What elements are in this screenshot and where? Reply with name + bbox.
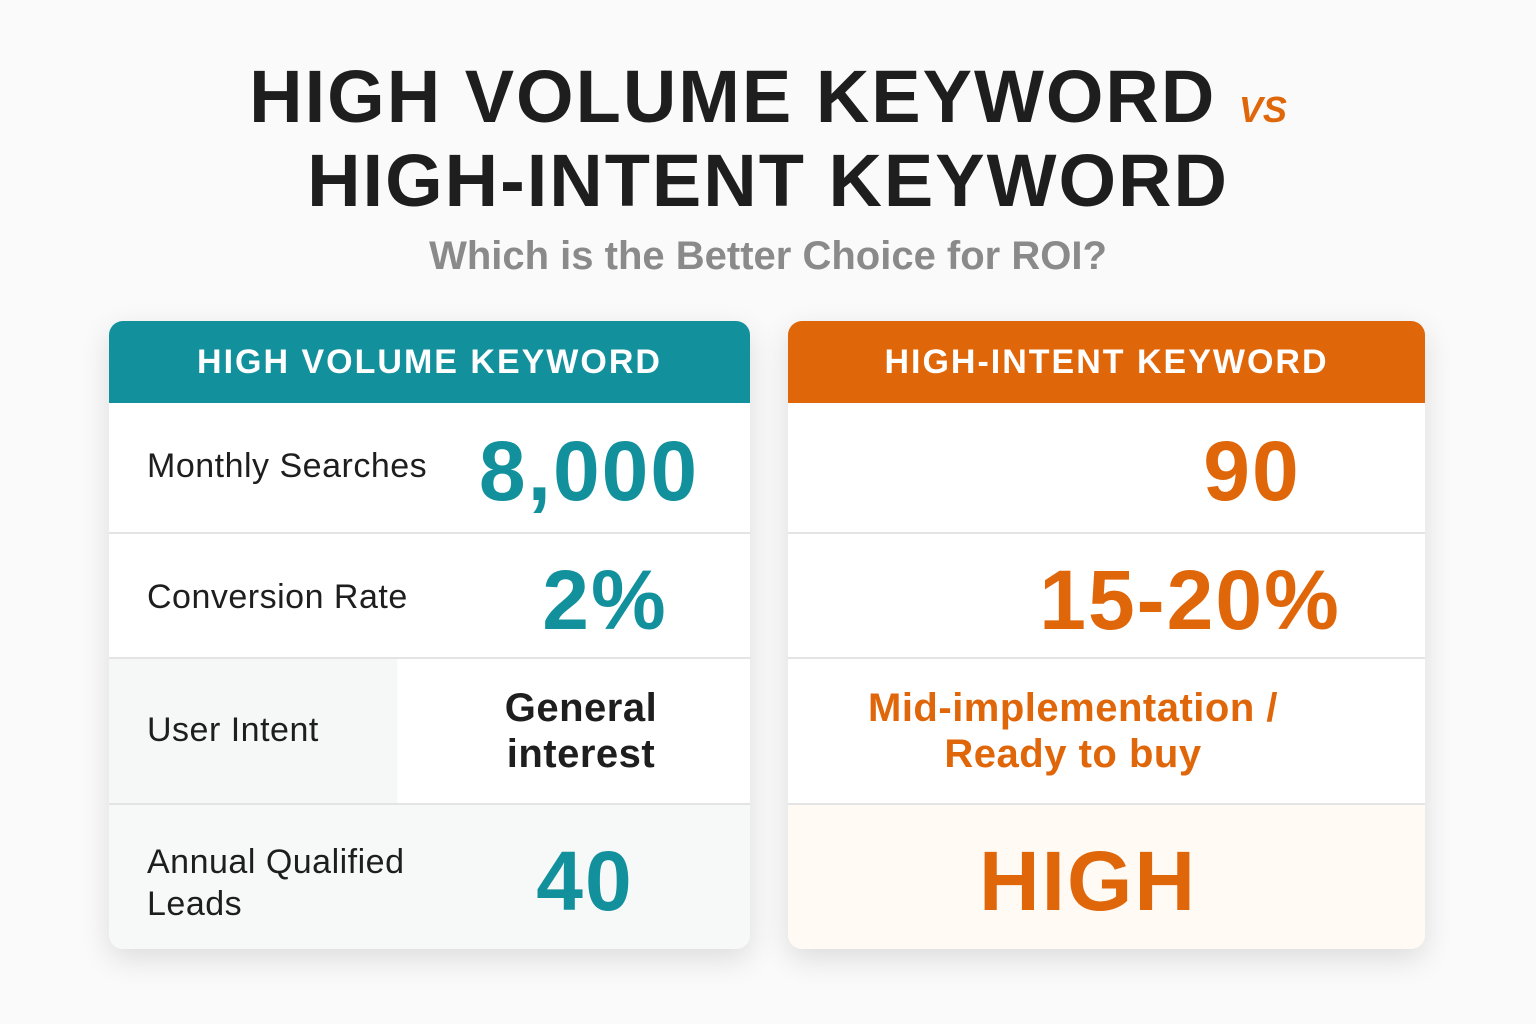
row: conversion: [109, 532, 750, 659]
value: conversion: [788, 532, 1425, 659]
row: leads: 40: [536, 834, 634, 928]
row: monthly searches: [147, 424, 699, 518]
value: high: HIGH: [979, 834, 1197, 928]
header teal: [109, 321, 750, 403]
title line 2: HIGH-INTENT KEYWORD: [307, 139, 1229, 222]
row: intent: [109, 657, 750, 805]
row: monthly searches: Monthly Searches: [147, 447, 427, 485]
value: intent: [788, 657, 1425, 805]
panel: high volume: [109, 321, 750, 949]
row: monthly searches: 8,000: [479, 424, 699, 518]
title line 1: HIGH VOLUME KEYWORD VS: [249, 55, 1287, 138]
header teal: HIGH VOLUME KEYWORD: [197, 343, 662, 381]
header orange: [788, 321, 1425, 403]
value: high: [788, 803, 1425, 951]
value: intent: Ready to buy: [944, 732, 1202, 776]
panel: high intent: [788, 321, 1425, 949]
value: conversion: 15-20%: [1039, 553, 1341, 647]
value: 90: 90: [1203, 424, 1301, 518]
row: leads: Annual Qualified: [147, 843, 405, 881]
value: intent: Mid-implementation /: [868, 686, 1278, 730]
row: leads: Leads: [147, 885, 242, 923]
row: intent: User Intent: [147, 711, 319, 749]
row: intent: General interest: [505, 686, 657, 776]
subtitle: Which is the Better Choice for ROI?: [429, 234, 1107, 278]
header orange: HIGH-INTENT KEYWORD: [884, 343, 1329, 381]
row: conversion: 2%: [542, 553, 668, 647]
row: conversion: Conversion Rate: [147, 578, 408, 616]
row: leads: [109, 803, 750, 951]
